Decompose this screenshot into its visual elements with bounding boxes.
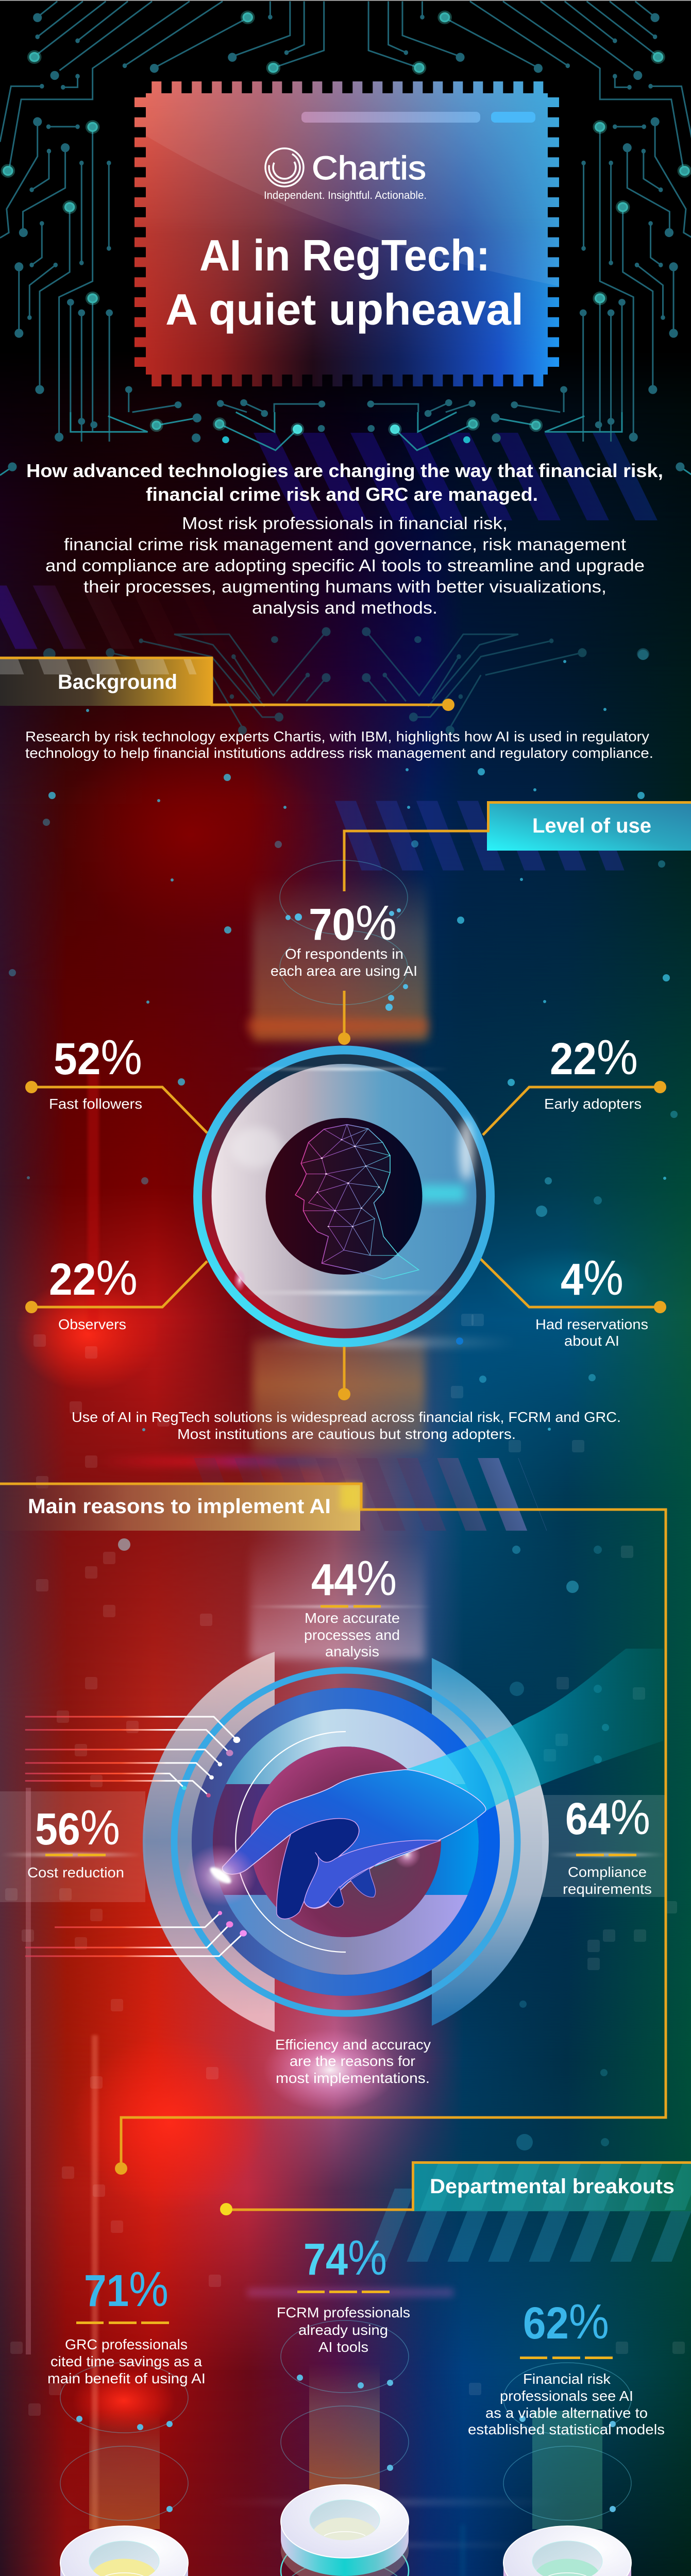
title: AI in RegTech: bbox=[199, 231, 490, 280]
stat: 56% cost reduction: Cost reduction bbox=[27, 1865, 124, 1880]
stat: 74% FCRM professionals bbox=[247, 2230, 453, 2355]
chip: title panel bbox=[134, 81, 559, 386]
connector to circle bbox=[338, 991, 350, 1045]
stat: 22% early adopters: 22% bbox=[550, 1030, 638, 1085]
stat: 71% GRC professionals: cited time savings as a bbox=[50, 2353, 202, 2369]
stat: 70% of respondents bbox=[271, 895, 417, 979]
stat: 22% observers: 22% bbox=[49, 1250, 138, 1306]
stat: 62% financial risk professionals: professionals see AI bbox=[500, 2388, 633, 2404]
section tab: Main reasons to implement AI bbox=[0, 1484, 666, 2175]
main reasons summary: Efficiency and accuracy bbox=[275, 2037, 431, 2053]
stat: 22% early adopters: Early adopters bbox=[544, 1096, 642, 1112]
intro heading bbox=[26, 460, 663, 505]
glow columns and light streaks bbox=[0, 732, 666, 2576]
background paragraph: Research by risk technology experts Chartis, with IBM, highlights how AI is used in regulatory bbox=[25, 728, 649, 744]
title bbox=[165, 231, 524, 334]
title: A quiet upheaval bbox=[165, 285, 524, 334]
stat: 70% of respondents: each area are using AI bbox=[271, 963, 417, 979]
stat: 44% more accurate: 44% bbox=[311, 1551, 397, 1606]
main reasons summary: most implementations. bbox=[276, 2070, 430, 2086]
stat: 4% had reservations: about AI bbox=[564, 1333, 619, 1349]
stat: 4% had reservations: Had reservations bbox=[535, 1316, 648, 1332]
stat: 70% of respondents: 70% bbox=[309, 895, 397, 951]
section tab: Background: Background bbox=[58, 671, 177, 693]
chip body with teeth bbox=[134, 81, 559, 386]
stat: 64% compliance requirements: Compliance bbox=[568, 1864, 647, 1880]
section tab: Background bbox=[0, 658, 454, 711]
section tab: Departmental breakouts bbox=[220, 2161, 691, 2215]
stat: 52% fast followers bbox=[25, 1030, 207, 1133]
chip highlight bars bbox=[301, 112, 535, 123]
stat: 22% early adopters bbox=[483, 1030, 666, 1135]
intro heading: financial crime risk and GRC are managed. bbox=[146, 484, 538, 505]
Chartis logo bbox=[263, 146, 427, 201]
stat: 71% GRC professionals: GRC professionals bbox=[65, 2336, 188, 2352]
stat: 74% FCRM professionals: AI tools bbox=[318, 2339, 368, 2355]
intro heading: How advanced technologies are changing the way that financial risk, bbox=[26, 460, 663, 481]
scattered background particles bbox=[5, 650, 685, 2576]
level-of-use summary: Most institutions are cautious but strong adopters. bbox=[177, 1426, 516, 1442]
thin spiral ornaments bbox=[60, 2320, 631, 2520]
stat: 4% had reservations: 4% bbox=[561, 1250, 623, 1306]
stat: 74% FCRM professionals: 74% bbox=[304, 2230, 387, 2285]
level-of-use summary: Use of AI in RegTech solutions is widespread across financial risk, FCRM and GRC. bbox=[72, 1409, 621, 1425]
stat: 71% GRC professionals: main benefit of using AI bbox=[47, 2370, 206, 2386]
background paragraph bbox=[25, 728, 653, 761]
stat: 70% of respondents: Of respondents in bbox=[285, 946, 403, 962]
circuit traces around the chip bbox=[0, 2, 691, 475]
intro paragraph bbox=[45, 514, 645, 617]
section tab: Level of use bbox=[344, 801, 691, 891]
top edge rule bbox=[0, 0, 691, 1]
main reasons summary: are the reasons for bbox=[290, 2053, 415, 2069]
stat: 44% more accurate: processes and bbox=[304, 1627, 400, 1643]
stat: 64% compliance requirements bbox=[563, 1790, 652, 1897]
cylinder icon: FCRM bbox=[281, 2485, 409, 2576]
intro paragraph: and compliance are adopting specific AI tools to streamline and upgrade bbox=[45, 556, 645, 575]
Chartis logo: Independent. Insightful. Actionable. bbox=[264, 190, 427, 201]
stat: 4% had reservations bbox=[480, 1250, 666, 1349]
stat: 62% financial risk professionals: established statistical models bbox=[468, 2421, 665, 2437]
stat: 64% compliance requirements: 64% bbox=[565, 1790, 650, 1845]
fingertip glint bbox=[184, 1844, 257, 1906]
stat: 56% cost reduction bbox=[27, 1800, 124, 1880]
faint circuit behind background tab bbox=[43, 627, 649, 735]
stat: 74% FCRM professionals: already using bbox=[298, 2322, 388, 2338]
stat: 62% financial risk professionals: Financial risk bbox=[523, 2371, 611, 2387]
stat: 74% FCRM professionals: FCRM professionals bbox=[277, 2304, 410, 2320]
light columns above cylinders bbox=[89, 2363, 602, 2529]
section tab: Departmental breakouts: Departmental breakouts bbox=[430, 2175, 675, 2198]
stat: 56% cost reduction: 56% bbox=[35, 1800, 120, 1855]
stat: 71% GRC professionals: 71% bbox=[84, 2262, 168, 2317]
Chartis logo: Chartis bbox=[312, 149, 426, 187]
central circle with AI head bbox=[198, 1050, 491, 1343]
intro paragraph: financial crime risk management and governance, risk management bbox=[64, 535, 626, 554]
hand and swoosh bbox=[223, 1649, 663, 1919]
stat: 44% more accurate: analysis bbox=[325, 1643, 379, 1659]
stat: 62% financial risk professionals: as a viable alternative to bbox=[485, 2405, 648, 2421]
stat: 52% fast followers: 52% bbox=[54, 1030, 142, 1085]
intro paragraph: analysis and methods. bbox=[252, 598, 437, 617]
stat: 71% GRC professionals bbox=[47, 2262, 206, 2386]
level-of-use summary bbox=[72, 1409, 621, 1442]
stat: 44% more accurate bbox=[247, 1551, 433, 1659]
circuit wires to stat cost reduction bbox=[25, 1717, 247, 1956]
thin spiral ornament bbox=[280, 860, 408, 1011]
main reasons summary bbox=[275, 2037, 431, 2086]
cylinder icon: GRC bbox=[60, 2526, 188, 2576]
intro paragraph: their processes, augmenting humans with better visualizations, bbox=[83, 577, 606, 596]
cylinder icon: financial risk bbox=[503, 2526, 631, 2576]
stat: 22% observers bbox=[25, 1250, 207, 1332]
circular hand graphic bbox=[172, 1649, 663, 2015]
section tab: Level of use: Level of use bbox=[532, 815, 651, 837]
section tab: Main reasons to implement AI: Main reasons to implement AI bbox=[28, 1495, 331, 1518]
stat: 62% financial risk professionals bbox=[468, 2294, 665, 2437]
stat: 62% financial risk professionals: 62% bbox=[523, 2294, 609, 2349]
intro paragraph: Most risk professionals in financial risk, bbox=[182, 514, 508, 533]
stat: 22% observers: Observers bbox=[58, 1316, 126, 1332]
background paragraph: technology to help financial institutions address risk management and regulatory compliance. bbox=[25, 745, 653, 761]
icon: wireframe head bbox=[295, 1125, 419, 1279]
connector below circle bbox=[338, 1347, 350, 1400]
stat: 52% fast followers: Fast followers bbox=[49, 1096, 142, 1112]
stat: 64% compliance requirements: requirements bbox=[563, 1881, 652, 1897]
stat: 44% more accurate: More accurate bbox=[305, 1610, 400, 1626]
